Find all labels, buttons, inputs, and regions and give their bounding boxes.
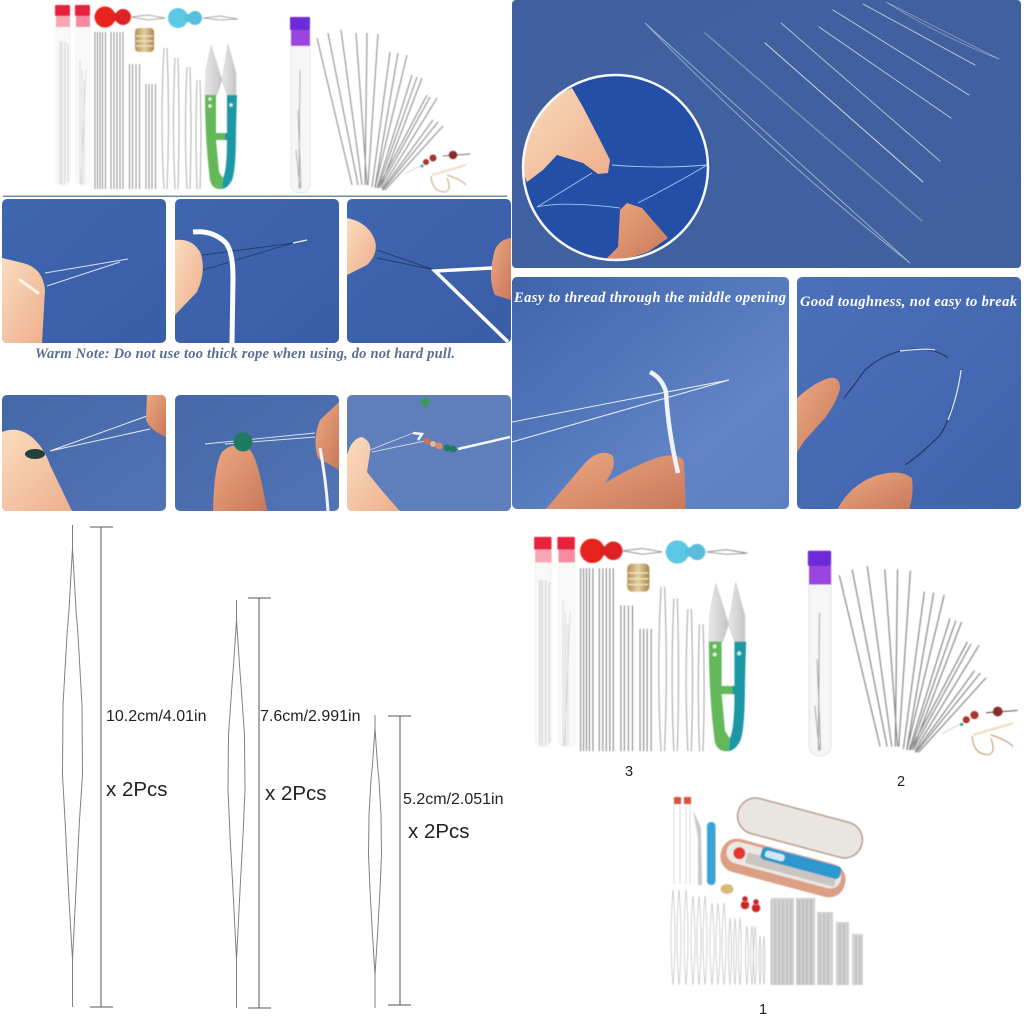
icon: red capped tube <box>534 537 552 747</box>
icon: thimble <box>135 28 154 52</box>
white thread <box>413 433 510 449</box>
icon: second red capped tube <box>75 5 90 185</box>
icon: beads and thread <box>405 151 470 192</box>
panel: good toughness <box>797 277 1021 510</box>
finger <box>797 378 840 452</box>
right finger <box>315 402 339 470</box>
big eye needles <box>162 48 201 189</box>
bent needle <box>844 349 961 465</box>
label 3: 3 <box>625 764 633 780</box>
red threaders <box>740 896 760 912</box>
needle <box>377 250 435 270</box>
needle <box>203 242 293 270</box>
icon: beads and thread <box>942 707 1018 755</box>
quantity label: x 2Pcs <box>408 820 470 843</box>
quantity label: x 2Pcs <box>265 782 327 805</box>
panel: bead step 1 <box>2 395 166 511</box>
needle <box>62 525 82 1007</box>
straight needles <box>581 568 651 751</box>
needle eye <box>293 240 307 243</box>
green bead <box>25 449 45 459</box>
icon: blue gourd threader <box>666 540 747 564</box>
ruler <box>90 527 113 1007</box>
icon: scissors <box>709 582 746 751</box>
panel: threading step 1 <box>2 199 166 343</box>
quantity label: x 2Pcs <box>106 778 168 801</box>
thread <box>320 448 328 511</box>
caption: Easy to thread through the middle opening <box>513 290 786 306</box>
label 1: 1 <box>759 1002 767 1018</box>
ruler <box>388 716 411 1005</box>
panel: bead step 2 <box>175 395 339 511</box>
panel: easy to thread <box>512 277 789 510</box>
needle highlight <box>900 349 961 420</box>
icon: purple capped tube <box>290 17 310 193</box>
straight needle blocks <box>771 898 863 985</box>
needle fan <box>317 30 443 190</box>
icon: blue gourd threader <box>168 8 238 28</box>
right finger <box>146 395 166 437</box>
panel: product kit 2 <box>808 551 1018 756</box>
panel: product kit 1 <box>671 794 866 985</box>
panel: threading step 2 <box>175 199 339 343</box>
right fingers <box>491 238 511 300</box>
finger <box>213 445 267 511</box>
left hand <box>2 430 72 511</box>
needle <box>205 433 315 444</box>
length label: 5.2cm/2.051in <box>403 791 504 808</box>
divider line <box>3 196 507 197</box>
blue case <box>707 822 716 885</box>
red threader in tin <box>732 846 747 861</box>
bead string <box>424 438 456 452</box>
blue scissors in tin <box>760 846 842 880</box>
white thread <box>435 268 508 342</box>
needle <box>228 600 245 1008</box>
wavy big eye needles <box>671 890 765 985</box>
panel: product kit top left <box>55 5 238 189</box>
thumb <box>837 472 913 510</box>
caption: Good toughness, not easy to break <box>800 294 1018 310</box>
loose needles <box>645 2 999 263</box>
finger <box>2 258 45 343</box>
white scissor hole in tin <box>764 850 785 862</box>
ruler <box>248 598 271 1008</box>
big eye needles <box>659 587 704 751</box>
needle fan <box>839 566 986 752</box>
needle size 5.2cm <box>368 715 504 1008</box>
fingernail <box>20 280 38 293</box>
finger <box>175 240 203 315</box>
needle size 10.2cm <box>62 525 207 1007</box>
small thimble <box>720 884 734 894</box>
length label: 7.6cm/2.991in <box>260 708 361 725</box>
needle <box>50 416 150 451</box>
icon: red capped tube <box>55 5 70 185</box>
icon: red gourd threader <box>94 6 165 28</box>
label 2: 2 <box>897 774 905 790</box>
green bead <box>234 432 252 452</box>
icon: second red capped tube <box>557 537 575 747</box>
green bead loose <box>420 398 430 406</box>
straight needles <box>95 32 156 189</box>
finger <box>347 437 400 511</box>
magnified circle <box>518 75 708 262</box>
tin lid <box>734 794 866 862</box>
needle <box>368 715 382 1008</box>
panel: bead step 3 <box>347 395 511 511</box>
needle size 7.6cm <box>228 598 361 1008</box>
lower hand <box>606 203 668 259</box>
icon: thimble <box>627 564 649 592</box>
finger <box>347 218 376 275</box>
white thread <box>650 372 678 473</box>
needle pack in tin <box>745 852 837 887</box>
icon: red gourd threader <box>580 539 662 563</box>
warm note text: Warm Note: Do not use too thick rope when using, do not hard pull. <box>35 346 455 362</box>
needle loop <box>537 165 707 208</box>
needle <box>370 433 425 452</box>
small red tubes <box>674 797 691 884</box>
tweezers <box>693 810 702 885</box>
icon: purple capped tube <box>808 551 831 756</box>
needle <box>512 380 729 442</box>
hand <box>545 453 686 510</box>
icon: scissors <box>205 44 237 189</box>
panel: needles on blue with magnified circle <box>512 0 1021 268</box>
length label: 10.2cm/4.01in <box>106 708 207 725</box>
panel: threading step 3 <box>347 199 511 343</box>
panel: product kit 3 <box>534 537 747 751</box>
panel: purple tube and needle fan top <box>290 17 470 193</box>
tin tray <box>717 835 849 901</box>
upper hand <box>518 88 610 182</box>
white thread <box>193 232 233 343</box>
needle <box>45 259 128 286</box>
